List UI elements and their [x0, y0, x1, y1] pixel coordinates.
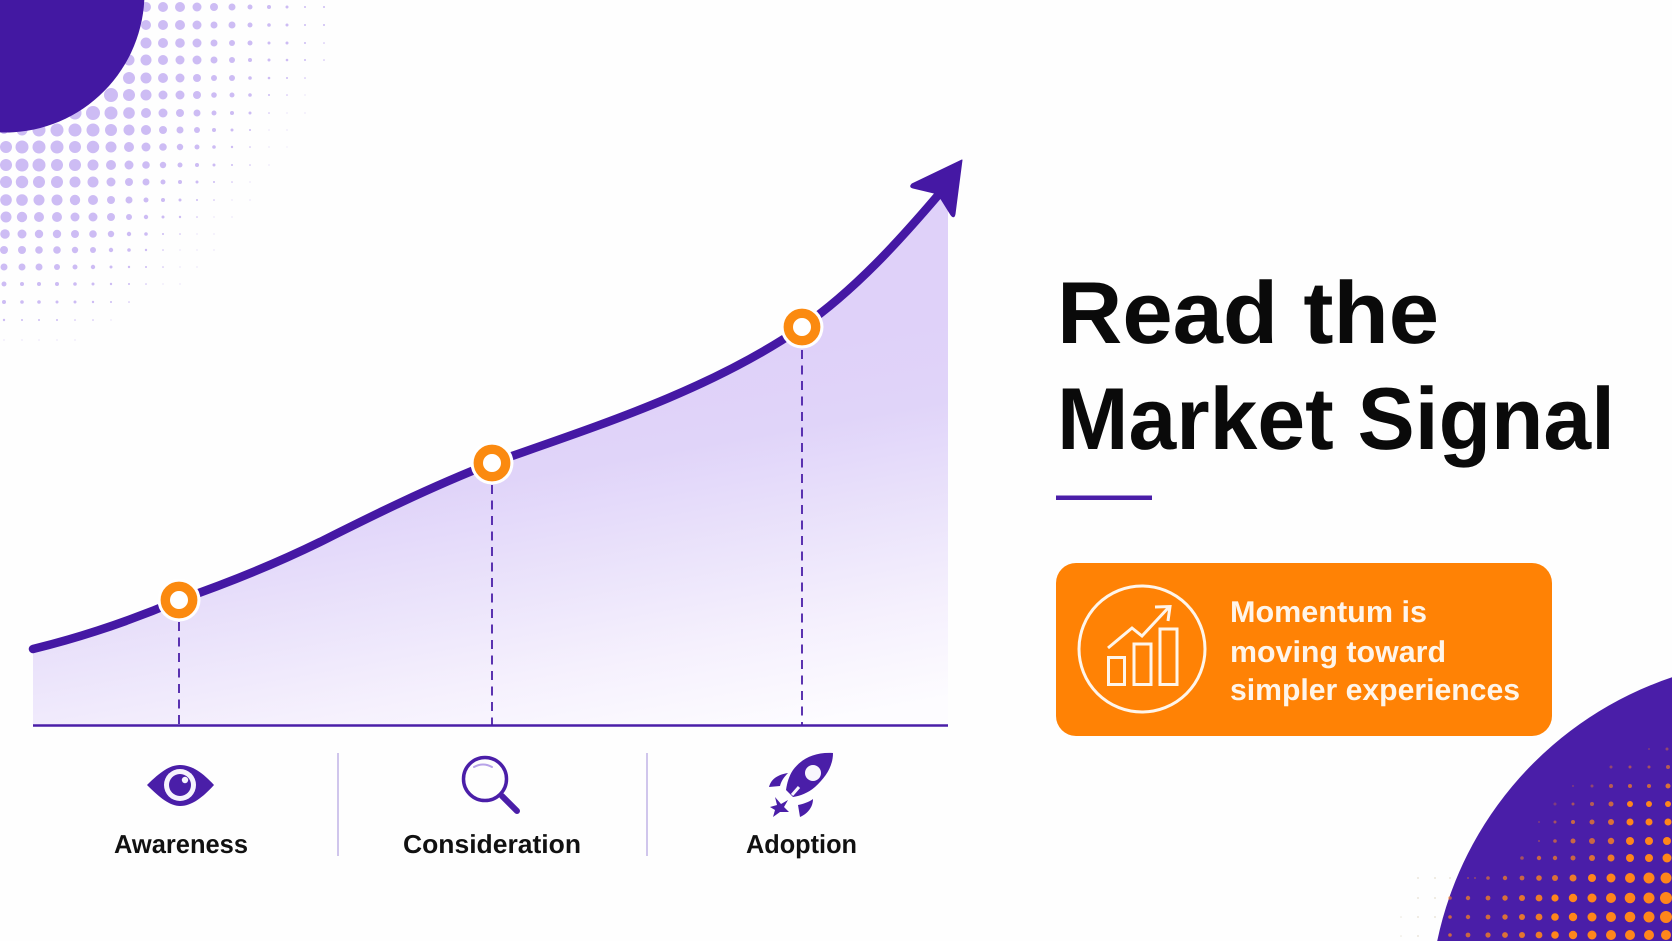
separator: awareness and consideration: [337, 753, 339, 856]
separator: consideration and adoption: [646, 753, 648, 856]
marker: adoption: [780, 306, 824, 348]
callout text: Momentum is: [1230, 596, 1427, 629]
dashed drop line: consideration: [491, 485, 493, 725]
icon: rocket: [769, 753, 833, 817]
stage: adoption: [746, 753, 857, 859]
label: consideration: Consideration: [403, 829, 581, 859]
callout text: simpler experiences: [1230, 674, 1520, 707]
callout text: [1230, 596, 1520, 707]
purple circle with orange halftone: bottom right: [1437, 677, 1672, 941]
trend line: [33, 193, 940, 649]
marker: consideration: [470, 442, 514, 484]
callout text: moving toward: [1230, 636, 1446, 669]
label: adoption: Adoption: [746, 829, 857, 859]
title underline: [1056, 496, 1152, 500]
title: Market Signal: [1057, 369, 1615, 468]
icon: magnifying glass: [464, 758, 517, 811]
title: Read the: [1057, 263, 1439, 362]
dashed drop line: adoption: [801, 350, 803, 725]
chart area fill: [33, 184, 948, 725]
marker: awareness: [158, 578, 200, 622]
label: awareness: Awareness: [114, 829, 248, 859]
dashed drop line: awareness: [178, 622, 180, 725]
growth chart: [33, 160, 962, 726]
halftone dots: top left: [0, 2, 325, 340]
icon: rising bar chart in circle: [1079, 586, 1205, 712]
purple quarter circle: top left: [0, 0, 144, 132]
faint dots left of bottom right circle: [1400, 877, 1451, 937]
arrow head: [911, 160, 962, 217]
title: [1057, 263, 1615, 468]
callout card: [1056, 563, 1552, 736]
stage: awareness: [114, 765, 248, 859]
chart baseline: [33, 724, 948, 727]
stage: consideration: [403, 758, 581, 859]
icon: eye: [147, 765, 214, 806]
